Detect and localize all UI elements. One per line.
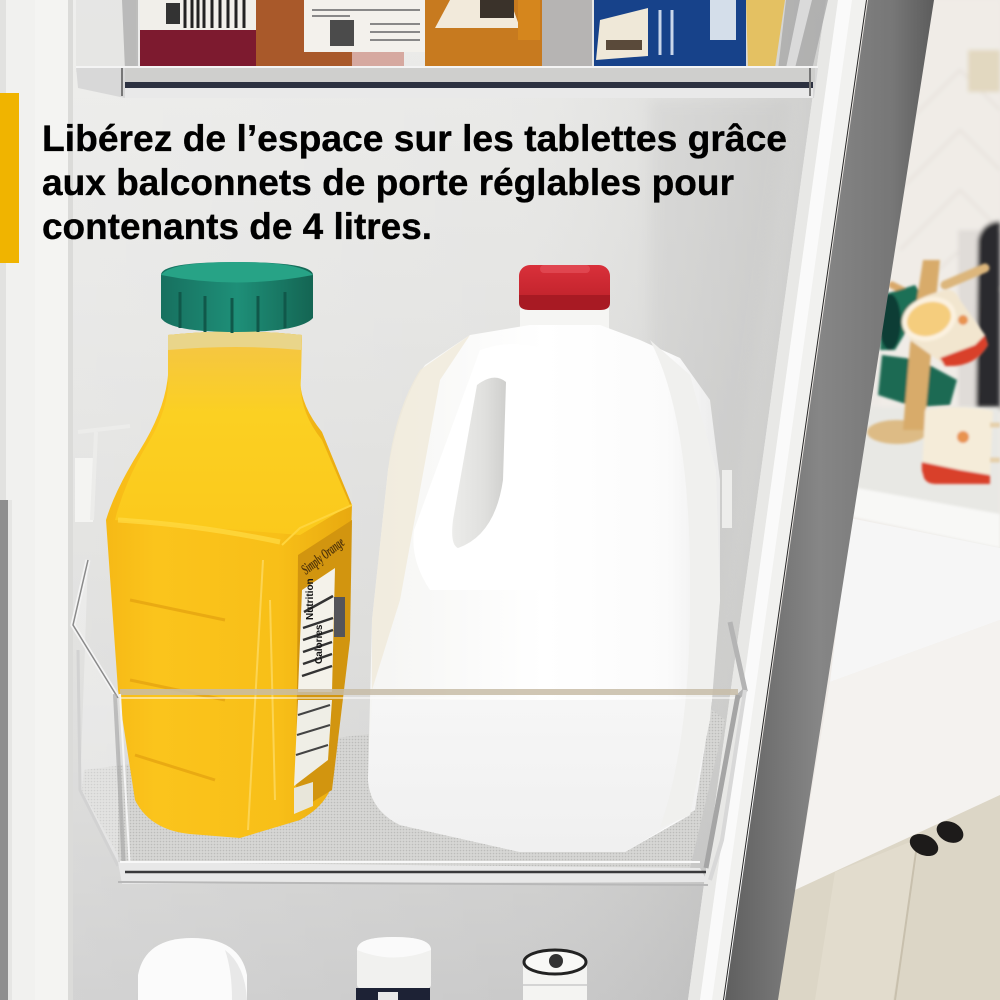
left wall [73, 560, 118, 862]
door liner panel [72, 0, 826, 1000]
jug body [368, 325, 720, 852]
door bin clip left [75, 426, 732, 528]
brand side label [296, 520, 352, 812]
accent bar [0, 93, 19, 263]
door bin [73, 560, 745, 885]
rim [73, 560, 118, 698]
tiled wall [880, 0, 1000, 460]
central shading [650, 100, 790, 760]
heading: aux balconnets de porte réglables pour [42, 161, 734, 203]
upper door bin with jars [76, 0, 828, 98]
orange juice bottle [106, 332, 352, 838]
gap [542, 0, 592, 66]
right frame highlight [688, 0, 838, 1000]
heading: Libérez de l’espace sur les tablettes grâce [42, 117, 787, 159]
handle [413, 344, 555, 590]
embossed lines [130, 600, 225, 780]
orange juice bottle: Simply Orange [299, 535, 348, 578]
black cabinet knobs [906, 817, 967, 860]
body [106, 332, 352, 838]
jar: orange 1 [256, 0, 352, 66]
neck [500, 305, 640, 350]
dark seam [723, 0, 866, 1000]
lower jug through glass [368, 700, 712, 852]
left translucent side [372, 335, 470, 690]
lower shelf: white-cap bottle [356, 937, 431, 1000]
lower shelf: white jug [138, 938, 247, 1000]
kitchen background [760, 0, 1000, 1000]
green cap [161, 262, 313, 333]
left frame shadow [0, 0, 6, 1000]
shoulder highlight [115, 332, 350, 535]
heading [42, 117, 787, 247]
sink [830, 518, 1000, 682]
counter [855, 407, 1000, 550]
heading: contenants de 4 litres. [42, 205, 432, 247]
bin floor mesh [82, 700, 725, 868]
milk jug [368, 305, 720, 852]
nutrition label: Calories [314, 624, 325, 664]
background mugs on tree [867, 260, 1000, 484]
lower cabinets [770, 795, 1000, 1000]
bin base [118, 862, 708, 884]
nutrition label: Nutrition [305, 578, 316, 620]
jar: amber [425, 0, 542, 66]
corner edge [118, 520, 280, 542]
refrigerator door gasket [725, 0, 934, 1000]
red cap [519, 265, 610, 310]
lower shelf: child-proof cap [523, 950, 587, 1000]
jar: red [140, 0, 258, 66]
bin front lip [76, 66, 818, 98]
nutrition label [294, 568, 345, 814]
handle opening [452, 378, 506, 548]
blue box [594, 0, 746, 68]
bin side walls [76, 0, 136, 72]
cracker [746, 0, 785, 68]
